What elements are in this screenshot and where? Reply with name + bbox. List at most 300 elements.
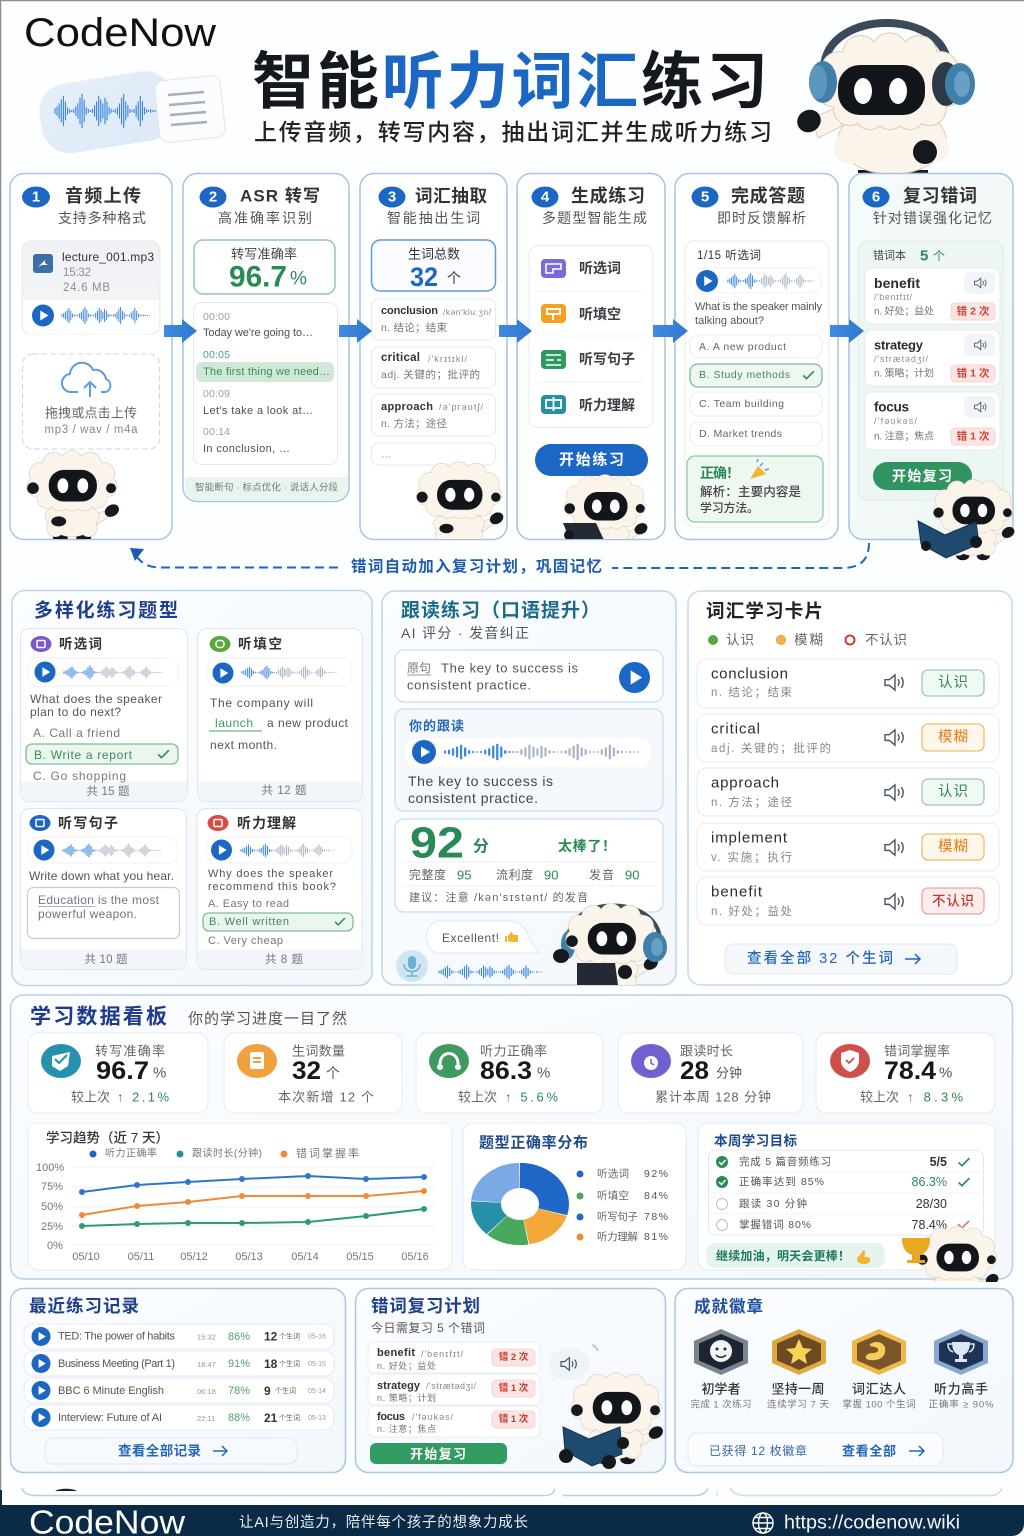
question card: B. Study methods — [699, 369, 790, 381]
question card: C. Team building — [699, 398, 784, 410]
weekly goals: 78.4% — [912, 1218, 947, 1232]
step heading: 复习错词 — [903, 186, 977, 206]
heading: 成就徽章 — [694, 1296, 763, 1316]
card: fill in the blank: 听填空 — [238, 636, 282, 652]
line chart: learning trend: 错词掌握率 — [296, 1146, 359, 1160]
badge: vocabulary master: 掌握 100 个生词 — [842, 1398, 916, 1410]
review word: benefit: 错 2 次 — [499, 1351, 529, 1363]
card: fill in the blank: The company will — [210, 696, 313, 710]
stat: new words — [224, 1033, 402, 1113]
panel: learning dashboard — [10, 995, 1012, 1307]
word card: more: … — [381, 450, 391, 460]
stat: mistake mastery: 错词掌握率 — [884, 1044, 950, 1058]
icon: globe — [753, 1513, 773, 1533]
card: fill in the blank: launch — [215, 716, 253, 730]
word card: critical: /'krɪtɪkl/ — [428, 354, 467, 364]
line chart: learning trend: 学习趋势（近 7 天） — [46, 1130, 169, 1146]
heading: 错词复习计划 — [371, 1296, 480, 1316]
mascot: header sheep with headphones — [793, 23, 975, 174]
review word: benefit — [368, 1342, 540, 1373]
word card: focus: /'fəʊkəs/ — [874, 416, 917, 426]
question card: A. A new product — [699, 341, 786, 353]
badge summary — [688, 1433, 943, 1466]
feature strip — [185, 477, 348, 501]
stat: transcription accuracy: ↑ 2.1% — [117, 1090, 169, 1104]
weekly goals: 跟读 30 分钟 — [739, 1197, 807, 1210]
step badge 2: 2 — [209, 188, 217, 206]
record row: 05-13 — [308, 1415, 326, 1422]
card: implement: 模糊 — [938, 838, 968, 855]
word card: approach: /ə'prəʊtʃ/ — [439, 402, 483, 412]
subtitle: 上传音频，转写内容，抽出词汇并生成听力练习 — [254, 119, 772, 145]
review word: focus: focus — [377, 1411, 405, 1423]
record row: 21 — [264, 1411, 278, 1425]
review word: benefit: n. 好处；益处 — [377, 1360, 436, 1371]
panel: exercise types — [12, 590, 372, 986]
feedback box — [687, 456, 823, 522]
word card: critical — [372, 347, 496, 388]
step badge 6 — [862, 186, 890, 208]
card: implement: implement — [711, 830, 788, 846]
card: approach — [697, 768, 999, 816]
file card: 15:32 — [63, 267, 91, 279]
word card: benefit: n. 好处；益处 — [874, 304, 934, 318]
weekly goals: 掌握错词 80% — [739, 1218, 811, 1231]
card: dictation: 共 10 题 — [84, 953, 128, 966]
button: start practice — [535, 444, 648, 476]
record row: 06:18 — [197, 1387, 216, 1396]
panel: shadowing practice — [382, 591, 676, 995]
line chart: learning trend: 25% — [41, 1221, 63, 1233]
badge: beginner: 初学者 — [702, 1382, 740, 1396]
subheading: AI 评分 · 发音纠正 — [401, 625, 529, 641]
new word count card: 32 — [410, 262, 438, 292]
button: view all words — [725, 944, 957, 974]
stat: listening accuracy: ↑ 5.6% — [505, 1090, 558, 1104]
record row: 05-14 — [308, 1388, 326, 1395]
feedback box: 正确！ — [700, 465, 740, 481]
subheading: 你的学习进度一目了然 — [188, 1010, 347, 1028]
heading: 学习数据看板 — [30, 1004, 167, 1028]
review word: strategy — [368, 1374, 540, 1405]
stat: transcription accuracy: % — [153, 1064, 166, 1082]
stat: mistake mastery: % — [939, 1064, 952, 1082]
stat: shadowing duration: 28 — [680, 1057, 709, 1085]
card: listen and choose: C. Go shopping — [33, 769, 126, 783]
score card: 92 — [410, 818, 464, 868]
card: dictation: Write down what you hear. — [29, 869, 174, 883]
card: critical — [697, 714, 999, 762]
stat: transcription accuracy: 96.7 — [96, 1057, 149, 1085]
record row: 88% — [228, 1412, 250, 1424]
your recording card: consistent practice. — [408, 790, 538, 806]
button: start review — [370, 1443, 507, 1464]
word card: strategy: 错 1 次 — [957, 366, 990, 380]
record row: 9 — [264, 1384, 271, 1398]
subheading: 今日需复习 5 个错词 — [371, 1320, 485, 1335]
button: start review — [873, 462, 972, 490]
card: conclusion: n. 结论；结束 — [711, 685, 792, 699]
card: approach: approach — [711, 774, 779, 792]
word card: strategy: /'strætədʒi/ — [874, 354, 928, 364]
record row: 05-15 — [308, 1361, 326, 1368]
button: start practice: 开始练习 — [559, 450, 624, 468]
panel: step 5 answer questions — [675, 174, 838, 540]
stat: new words: 32 — [292, 1057, 321, 1085]
word card: critical: critical — [381, 352, 420, 364]
record row — [24, 1324, 334, 1349]
badge: beginner — [690, 1329, 752, 1410]
question card: 1/15 听选词 — [697, 249, 761, 262]
accuracy card — [194, 240, 335, 294]
transcript list: The first thing we need… — [203, 366, 330, 378]
word card: strategy: n. 策略；计划 — [874, 366, 934, 380]
word card: strategy: strategy — [874, 338, 924, 352]
transcript list: 00:00 — [203, 311, 230, 323]
arrow: review feedback loop — [130, 543, 869, 576]
feature strip: 智能断句 · 标点优化 · 说话人分段 — [195, 482, 338, 494]
step heading: 音频上传 — [65, 185, 141, 206]
score card: 完整度 — [409, 867, 446, 882]
line chart: learning trend: 0% — [47, 1240, 63, 1252]
stat: shadowing duration: 累计本周 128 分钟 — [655, 1090, 771, 1104]
review word: strategy: 错 1 次 — [499, 1382, 529, 1394]
step badge 1: 1 — [32, 188, 40, 206]
record row: Business Meeting (Part 1) — [58, 1358, 175, 1370]
badge: listening expert — [928, 1329, 994, 1410]
step badge 1 — [22, 186, 50, 208]
donut chart: accuracy by type: 78% — [644, 1211, 668, 1223]
line chart: learning trend: 05/14 — [291, 1251, 319, 1263]
score card: 发音 — [589, 867, 614, 882]
upload drop zone: 拖拽或点击上传 — [45, 406, 137, 420]
heading: 多样化练习题型 — [34, 598, 178, 622]
stat: listening accuracy: 86.3 — [480, 1057, 532, 1085]
mascot: sheep with headphones and tablet — [553, 903, 667, 985]
your recording card: 你的跟读 — [409, 718, 464, 734]
new word count card: 生词总数 — [408, 246, 460, 262]
line chart: learning trend: 75% — [41, 1181, 63, 1193]
exercise type list: 听力理解 — [579, 397, 635, 413]
weekly goals: 5/5 — [930, 1155, 947, 1169]
review word: strategy: strategy — [377, 1380, 421, 1392]
speech bubble: Excellent! — [442, 931, 499, 945]
microphone button — [396, 950, 428, 982]
word card: focus — [865, 392, 1000, 450]
accuracy card: 转写准确率 — [231, 246, 297, 262]
card: critical: adj. 关键的；批评的 — [711, 741, 831, 755]
badge: listening expert: 听力高手 — [934, 1382, 988, 1396]
step badge 5 — [692, 186, 718, 208]
card: critical: 模糊 — [938, 728, 968, 746]
new word count card: 个 — [447, 270, 461, 286]
word card: focus: n. 注意；焦点 — [874, 430, 934, 442]
line chart: learning trend: 100% — [36, 1162, 64, 1174]
record row — [24, 1378, 334, 1403]
card: benefit: n. 好处；益处 — [711, 904, 792, 918]
record row: 18:47 — [197, 1360, 216, 1369]
cut-off panels above footer — [0, 1488, 1002, 1506]
card: fill in the blank: 共 12 题 — [262, 784, 307, 797]
arrow: step 4 to 5 — [653, 319, 688, 343]
exercise type list: 听写句子 — [579, 351, 635, 367]
word card: benefit: benefit — [874, 275, 920, 291]
badge summary: 已获得 12 枚徽章 — [709, 1443, 807, 1458]
file card: 24.6 MB — [63, 282, 110, 294]
card: listen and choose: B. Write a report — [34, 748, 133, 762]
file card: lecture_001.mp3 — [62, 250, 154, 264]
arrow: step 5 to 6 — [830, 319, 864, 343]
button: view all records: 查看全部记录 — [118, 1442, 201, 1458]
stat: mistake mastery — [816, 1033, 995, 1113]
original sentence card: consistent practice. — [407, 678, 531, 692]
review word: benefit: /'benɪfɪt/ — [421, 1349, 463, 1359]
weekly goals: 86.3% — [912, 1175, 947, 1189]
step badge 2 — [200, 186, 226, 208]
mascot: sheep — [416, 461, 504, 539]
review word: benefit: benefit — [377, 1347, 415, 1359]
review word: strategy: /'strætədʒi/ — [426, 1381, 476, 1391]
score card: 流利度 — [496, 867, 533, 882]
score card: 95 — [457, 868, 471, 882]
badge: one week streak — [767, 1329, 829, 1410]
word card: conclusion: conclusion — [381, 305, 438, 317]
step subheading: 支持多种格式 — [58, 210, 146, 226]
mascot: sheep with book — [918, 480, 1016, 560]
card: fill in the blank — [198, 628, 362, 802]
card: listening comprehension: B. Well written — [209, 916, 289, 928]
heading: 词汇学习卡片 — [706, 600, 823, 622]
footer website: https://codenow.wiki — [784, 1512, 960, 1534]
badge: vocabulary master — [842, 1329, 916, 1410]
illustration: audio wave and document — [35, 67, 226, 157]
question card: talking about? — [695, 315, 764, 327]
new word count card — [372, 240, 496, 292]
word card: approach — [372, 394, 496, 436]
word card: focus: 错 1 次 — [957, 430, 990, 442]
card: implement: v. 实施；执行 — [711, 850, 792, 864]
step badge 3: 3 — [388, 188, 396, 206]
word card: benefit: 错 2 次 — [957, 304, 990, 318]
line chart: learning trend: 听力正确率 — [105, 1146, 157, 1160]
mascot: waving sheep — [27, 451, 121, 542]
stat: new words: 生词数量 — [292, 1044, 345, 1058]
step heading: ASR 转写 — [240, 186, 320, 206]
line chart: learning trend: 05/10 — [72, 1251, 100, 1263]
accuracy card: 96.7 — [229, 260, 287, 294]
transcript list: 00:14 — [203, 426, 230, 438]
panel: achievements — [675, 1288, 1013, 1472]
line chart: learning trend: 50% — [41, 1201, 63, 1213]
record row: 86% — [228, 1331, 250, 1343]
step subheading: 高准确率识别 — [218, 210, 312, 226]
recorded wave — [439, 965, 543, 979]
stat: listening accuracy: % — [537, 1064, 550, 1082]
donut chart: accuracy by type: 听选词 — [597, 1167, 629, 1180]
word card: more — [372, 443, 496, 465]
panel: step 3 vocabulary extraction — [360, 174, 507, 548]
donut chart: accuracy by type: 听力理解 — [597, 1230, 638, 1243]
stat: listening accuracy: 较上次 — [458, 1090, 497, 1104]
step badge 6: 6 — [872, 188, 880, 206]
exercise type list: 听填空 — [579, 306, 621, 322]
donut chart: accuracy by type: 84% — [644, 1190, 668, 1202]
card: listen and choose: 听选词 — [59, 636, 102, 652]
card: listening comprehension: A. Easy to read — [208, 898, 289, 910]
review word: strategy: n. 策略；计划 — [377, 1392, 436, 1403]
speech bubble with speaker — [549, 1345, 598, 1383]
transcript list: 00:05 — [203, 349, 230, 361]
card: listening comprehension — [197, 808, 362, 970]
stat: shadowing duration: 跟读时长 — [680, 1044, 733, 1058]
card: listening comprehension: 共 8 题 — [265, 953, 304, 966]
arrow: step 1 to 2 — [164, 319, 197, 343]
stat: listening accuracy — [416, 1033, 603, 1113]
question card — [685, 241, 829, 527]
word card: approach: n. 方法；途径 — [381, 417, 448, 430]
exercise type list: 听选词 — [579, 260, 621, 276]
donut chart: accuracy by type: 题型正确率分布 — [479, 1134, 588, 1152]
stat: mistake mastery: 较上次 — [860, 1090, 899, 1104]
card: listen and choose: plan to do next? — [30, 705, 121, 719]
mascot: sheep with tablet — [563, 474, 648, 539]
transcript list: Today we're going to… — [203, 327, 313, 339]
logo: CodeNow: CodeNow — [24, 11, 216, 55]
card: benefit: 不认识 — [932, 894, 974, 908]
file card — [22, 241, 160, 334]
question card: What is the speaker mainly — [695, 301, 822, 313]
record row: 91% — [228, 1358, 250, 1370]
arrow: step 2 to 3 — [339, 319, 372, 343]
review word: focus: n. 注意；焦点 — [377, 1423, 436, 1434]
stat: shadowing duration: 分钟 — [716, 1066, 742, 1080]
wrong word book: 个 — [933, 249, 945, 263]
stat: transcription accuracy — [28, 1033, 208, 1113]
question card: D. Market trends — [699, 428, 782, 440]
button: view all records — [45, 1438, 297, 1464]
record row: 12 — [264, 1330, 278, 1344]
step heading: 生成练习 — [571, 185, 645, 206]
card: dictation — [20, 808, 186, 970]
card: dictation: 听写句子 — [58, 815, 118, 831]
step badge 3 — [378, 186, 406, 208]
heading: 跟读练习（口语提升） — [401, 598, 600, 622]
card: listening comprehension: Why does the speaker — [208, 868, 333, 880]
arrow: review feedback loop: 错词自动加入复习计划，巩固记忆 — [351, 556, 602, 576]
speech bubble — [426, 921, 540, 953]
weekly goals: 继续加油，明天会更棒！ — [716, 1248, 850, 1263]
line chart: learning trend: 05/15 — [346, 1251, 374, 1263]
score card: 90 — [625, 868, 639, 882]
stat: listening accuracy: 听力正确率 — [480, 1044, 547, 1058]
weekly goals: 28/30 — [916, 1197, 947, 1211]
word card: conclusion — [372, 299, 496, 340]
stat: new words: 本次新增 12 个 — [278, 1090, 374, 1104]
heading: 最近练习记录 — [29, 1296, 139, 1316]
original sentence card: 原句 — [407, 661, 431, 675]
badge: listening expert: 正确率 ≥ 90% — [928, 1398, 994, 1410]
badge summary: 查看全部 — [842, 1444, 896, 1458]
panel: step 1 audio upload — [10, 174, 172, 542]
exercise type list — [529, 246, 653, 428]
upload drop zone — [22, 354, 160, 449]
arrow: step 3 to 4 — [499, 319, 532, 343]
record row: TED: The power of habits — [58, 1330, 176, 1342]
card: listen and choose — [20, 628, 188, 802]
your recording card — [395, 709, 663, 811]
transcript list: In conclusion, … — [203, 443, 290, 455]
record row: 78% — [228, 1385, 250, 1397]
button: start review: 开始复习 — [410, 1446, 466, 1462]
card: listening comprehension: C. Very cheap — [208, 935, 283, 947]
word card: conclusion: /kən'kluːʒn/ — [443, 307, 492, 317]
word card: benefit — [865, 268, 1000, 324]
card: dictation: Education is the most — [38, 893, 160, 907]
card: listening comprehension: recommend this book? — [208, 881, 336, 893]
stat: mistake mastery: 78.4 — [884, 1057, 936, 1085]
step subheading: 即时反馈解析 — [717, 210, 806, 226]
legend: 模糊 — [794, 632, 823, 648]
card: conclusion — [697, 659, 999, 708]
word card: approach: approach — [381, 401, 433, 413]
legend: 不认识 — [865, 632, 907, 648]
transcript list: 00:09 — [203, 388, 230, 400]
transcript list: Let's take a look at… — [203, 405, 313, 417]
panel: step 4 generate exercises — [517, 174, 665, 557]
review word: focus — [368, 1406, 540, 1437]
record row: 18 — [264, 1357, 278, 1371]
button: start review: 开始复习 — [892, 468, 952, 484]
card: critical: critical — [711, 720, 760, 738]
panel: vocabulary flashcards — [688, 591, 1012, 985]
card: conclusion: 认识 — [938, 674, 968, 691]
step heading: 词汇抽取 — [415, 186, 488, 206]
step heading: 完成答题 — [731, 185, 805, 206]
card: fill in the blank: a new product — [267, 716, 349, 730]
weekly goals: 完成 5 篇音频练习 — [739, 1155, 831, 1168]
card: benefit — [697, 877, 999, 925]
footer — [0, 1504, 1024, 1536]
accuracy card: % — [290, 268, 307, 290]
card: fill in the blank: next month. — [210, 738, 277, 752]
review word: focus: /'fəʊkəs/ — [412, 1412, 453, 1422]
score card: 建议：注意 /kən'sɪstənt/ 的发音 — [409, 890, 588, 904]
title: 智能听力词汇练习 — [252, 48, 768, 116]
record row — [24, 1351, 334, 1376]
stat: new words: 个 — [326, 1065, 340, 1081]
legend — [708, 632, 907, 648]
step subheading: 智能抽出生词 — [387, 210, 480, 226]
record row: 个生词 — [279, 1332, 300, 1340]
card: approach: n. 方法；途径 — [711, 795, 792, 809]
record row: 15:32 — [197, 1332, 216, 1342]
original sentence card — [395, 650, 663, 702]
score card: 太棒了！ — [558, 838, 616, 854]
line chart: learning trend: 05/13 — [235, 1251, 263, 1263]
step badge 5: 5 — [701, 188, 709, 206]
badge: one week streak: 坚持一周 — [772, 1382, 824, 1396]
record row: 05-16 — [308, 1334, 326, 1340]
badge: vocabulary master: 词汇达人 — [852, 1382, 906, 1396]
wrong word book: 5 — [920, 248, 928, 264]
record row: BBC 6 Minute English — [58, 1385, 164, 1397]
review word: focus: 错 1 次 — [499, 1413, 529, 1425]
panel: review plan — [356, 1288, 666, 1472]
score card: 90 — [544, 868, 558, 882]
word card: critical: adj. 关键的；批评的 — [381, 368, 480, 381]
step subheading: 针对错误强化记忆 — [873, 210, 992, 226]
stat: transcription accuracy: 转写准确率 — [95, 1044, 165, 1058]
